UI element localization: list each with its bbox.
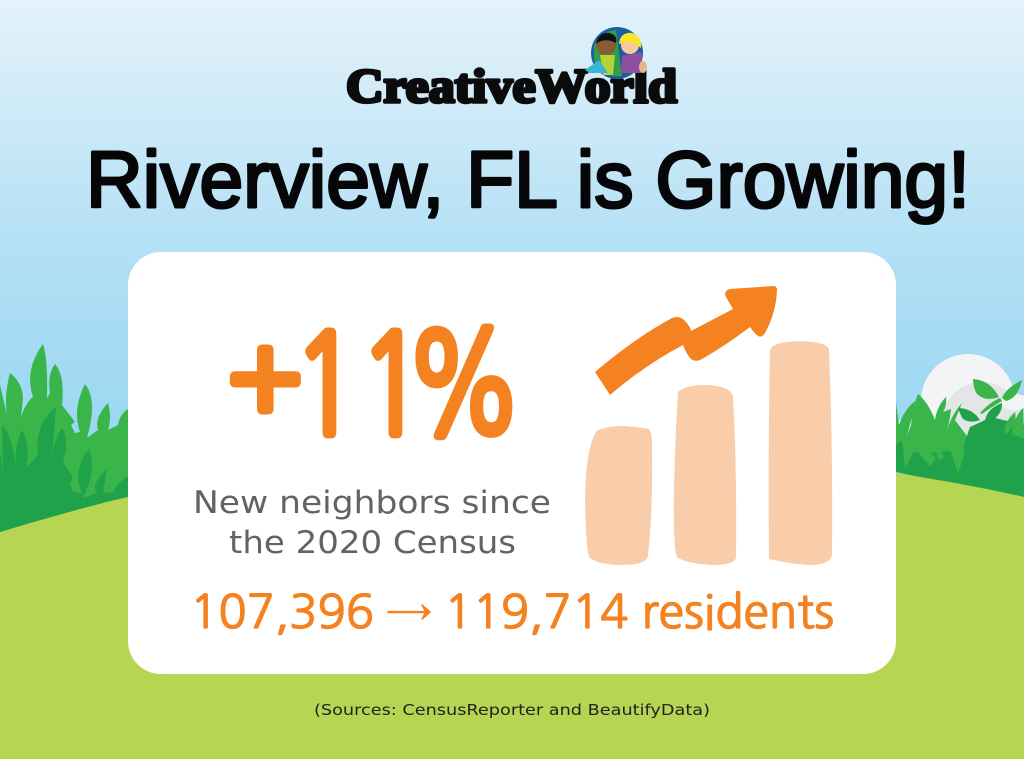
bar 3 [769, 341, 832, 565]
growth arrow [595, 286, 777, 395]
bar 1 [585, 426, 652, 565]
sun with clouds [896, 354, 1024, 462]
big stat: +11%: + [227, 324, 303, 439]
logo wordmark: CreativeWorld [346, 60, 677, 113]
sky background [0, 0, 1024, 540]
big stat: +11%: % [405, 316, 523, 454]
subtitle text: the 2020 Census [229, 525, 516, 561]
population change: 107,396 → 119,714 residents [190, 589, 834, 635]
sources note: (Sources: CensusReporter and BeautifyData) [314, 701, 710, 719]
title: Riverview, FL is Growing! [86, 135, 970, 224]
bar chart icon [585, 341, 832, 565]
logo: Creative World [346, 27, 677, 113]
big stat: +11% [227, 316, 523, 454]
big stat: +11%: 11 [293, 316, 425, 454]
logo emblem: two children in a globe [585, 27, 647, 79]
left bushes [0, 344, 128, 540]
right bushes [896, 379, 1024, 500]
green hill [0, 473, 1024, 759]
white content card [128, 252, 896, 674]
subtitle text: New neighbors since [193, 485, 551, 521]
bar 2 [674, 385, 736, 565]
subtitle text [193, 485, 551, 561]
